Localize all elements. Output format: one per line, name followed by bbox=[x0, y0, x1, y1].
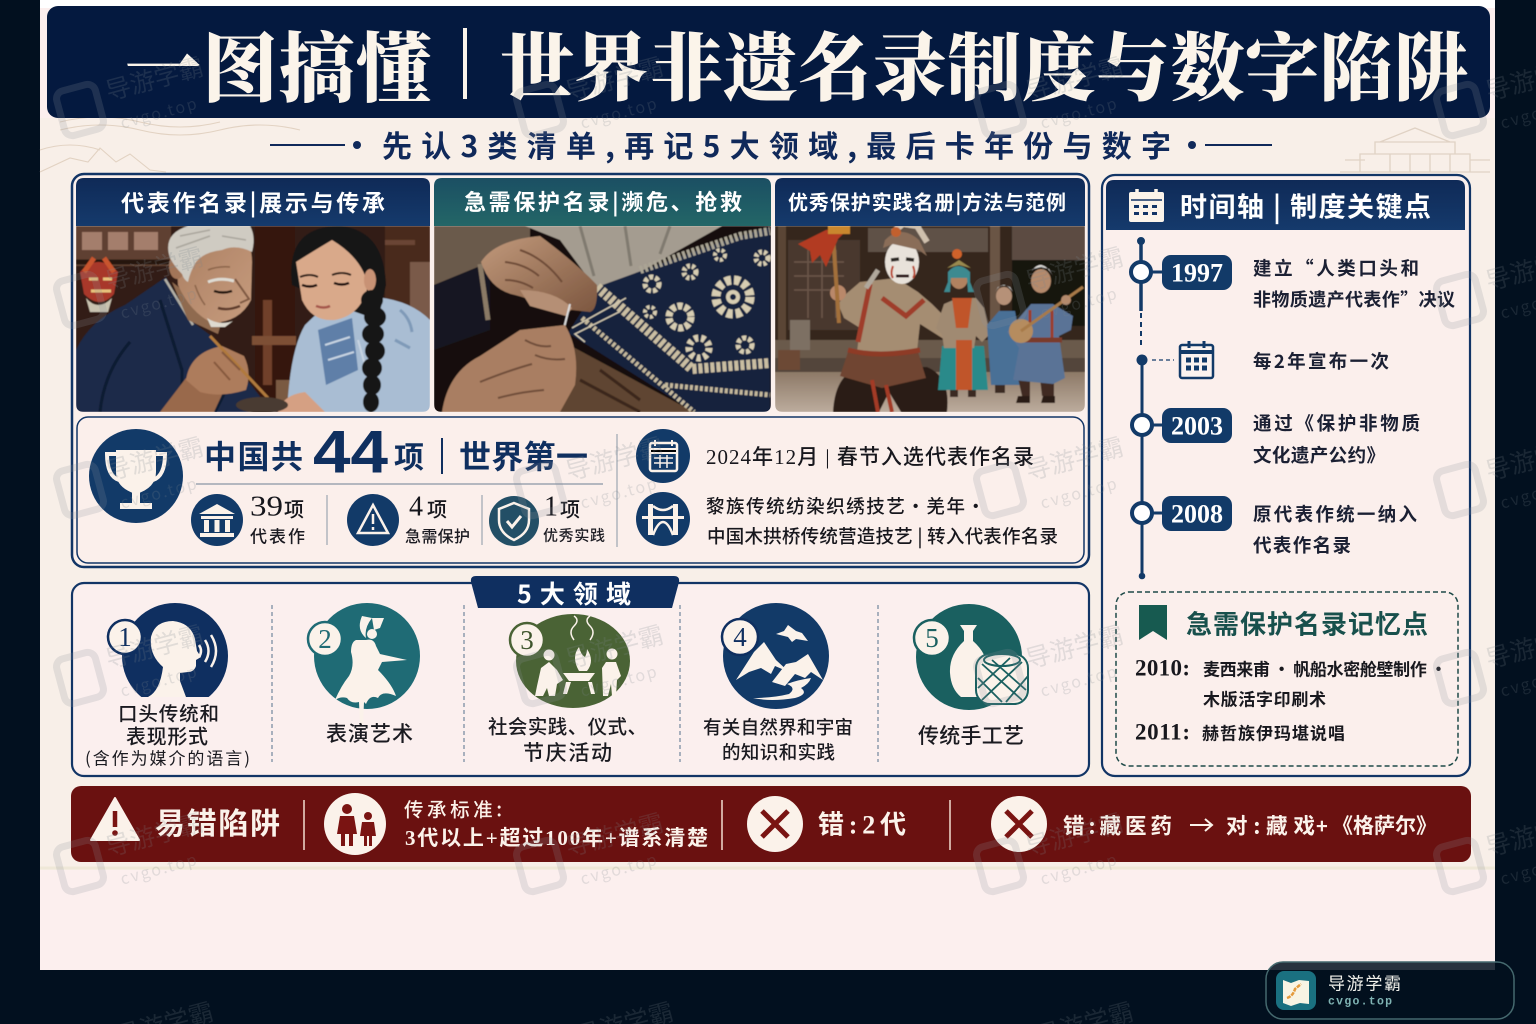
memo box: urgent list: 2010: bbox=[1135, 656, 1190, 680]
indigo cloth bbox=[568, 227, 770, 412]
panel: statistics bbox=[77, 417, 1084, 563]
milestone 2003: 文化遗产公约》 bbox=[1253, 442, 1385, 468]
icon: speaking head bbox=[148, 621, 201, 697]
watermarks: cvgo.top bbox=[117, 280, 201, 324]
floral pattern bbox=[645, 250, 768, 358]
young woman dress bbox=[287, 296, 430, 412]
stat: 1 best practice: 项 bbox=[560, 494, 580, 522]
subtitle: 先认3类清单,再记5大领域,最后卡年份与数字 bbox=[382, 122, 1171, 166]
milestone 1997: 建立“人类口头和 bbox=[1253, 255, 1419, 281]
tab: five domains bbox=[471, 575, 679, 611]
domain 3: social practices bbox=[488, 614, 647, 767]
panel: timeline bbox=[1102, 175, 1470, 776]
watermarks: 导游学霸 bbox=[101, 237, 207, 298]
icon: warning bbox=[347, 494, 399, 546]
watermarks: 导游学霸 bbox=[101, 47, 207, 108]
stat: 39 representative: 代表作 bbox=[250, 522, 305, 548]
icon: campfire with two people bbox=[535, 616, 621, 696]
hands and craft piece bbox=[278, 392, 325, 412]
watermarks: 导游学霸 bbox=[561, 803, 667, 864]
domain 2: performing arts: 表演艺术 bbox=[326, 718, 413, 748]
brand badge: cvgo.top bbox=[1328, 996, 1392, 1008]
milestone 2008 bbox=[1132, 496, 1417, 558]
old man head bbox=[172, 282, 222, 334]
badge 5: 5 bbox=[925, 623, 939, 653]
staff and tassel bbox=[798, 226, 850, 323]
brand badge bbox=[1266, 962, 1514, 1019]
braid bbox=[361, 290, 386, 412]
panel: common traps bar: 传承标准: bbox=[404, 794, 502, 822]
title text: 一图搞懂 bbox=[125, 8, 432, 118]
watermarks: 导游学霸 bbox=[561, 615, 667, 676]
watermarks: 导游学霸 bbox=[101, 427, 207, 488]
domain 2: performing arts bbox=[308, 603, 420, 748]
domain 1: oral traditions: (含作为媒介的语言) bbox=[85, 744, 250, 770]
badge 5 bbox=[914, 620, 950, 656]
icon: map logo bbox=[1276, 971, 1316, 1010]
badge 2: 2 bbox=[318, 624, 332, 654]
icon: bridge bbox=[636, 492, 690, 546]
watermarks: cvgo.top bbox=[1037, 90, 1121, 134]
watermarks: cvgo.top bbox=[577, 846, 661, 890]
watermarks: cvgo.top bbox=[117, 846, 201, 890]
performer in teal skirt bbox=[936, 249, 990, 397]
stat: 1 best practice bbox=[489, 492, 605, 546]
old man jacket bbox=[76, 277, 272, 412]
icon: bookmark bbox=[1139, 605, 1167, 640]
domain 5: traditional crafts bbox=[914, 604, 1028, 750]
memo box: urgent list: 急需保护名录记忆点 bbox=[1186, 604, 1428, 642]
title banner bbox=[47, 6, 1490, 118]
watermarks: cvgo.top bbox=[117, 90, 201, 134]
icon: calendar bbox=[636, 429, 690, 483]
list 3 header bbox=[775, 178, 1085, 226]
stat: 4 urgent: 急需保护 bbox=[405, 523, 470, 547]
stat: 4 urgent: 项 bbox=[427, 494, 447, 522]
watermarks: 导游学霸 bbox=[1021, 803, 1127, 864]
headline: China 44 items bbox=[204, 418, 588, 486]
badge 4 bbox=[722, 619, 758, 655]
memo box: urgent list bbox=[1116, 592, 1458, 766]
watermarks: cvgo.top bbox=[577, 658, 661, 702]
memo box: urgent list: 2011: bbox=[1135, 720, 1190, 744]
icon: museum bbox=[191, 494, 243, 546]
panel: five domains bbox=[72, 575, 1089, 776]
correction text: 对:藏戏 bbox=[1226, 810, 1315, 840]
watermarks: cvgo.top bbox=[1037, 658, 1121, 702]
list 3 header: 优秀保护实践名册|方法与范例 bbox=[788, 186, 1066, 216]
memo box: urgent list: 赫哲族伊玛堪说唱 bbox=[1202, 720, 1345, 744]
domain 4: nature and universe bbox=[703, 603, 853, 765]
timeline header: 时间轴 | 制度关键点 bbox=[1180, 186, 1431, 224]
watermarks: 导游学霸 bbox=[1021, 427, 1127, 488]
milestone 2008: 代表作名录 bbox=[1253, 532, 1351, 558]
milestone 2003 bbox=[1132, 408, 1420, 468]
note: transferred items: 黎族传统纺染织绣技艺·羌年· bbox=[706, 493, 985, 519]
badge 1 bbox=[108, 620, 142, 654]
lower hand bbox=[442, 325, 576, 412]
domain 3: social practices: 社会实践、仪式、 bbox=[488, 710, 647, 740]
watermarks: 导游学霸 bbox=[1021, 47, 1127, 108]
icon: warning triangle bbox=[91, 798, 139, 840]
note: transferred items: 中国木拱桥传统营造技艺 | 转入代表作名录 bbox=[707, 523, 1058, 549]
panel: common traps bar: 3代以上+超过100年+谱系清楚 bbox=[405, 826, 708, 850]
panel: three lists bbox=[72, 174, 1089, 567]
correction text: 错:藏医药 bbox=[1063, 810, 1172, 840]
domain 1: oral traditions bbox=[85, 603, 250, 770]
headline: China 44 items: 44 bbox=[313, 418, 389, 486]
note: transferred items bbox=[706, 493, 1058, 549]
badge 3 bbox=[510, 623, 544, 657]
stat: 4 urgent bbox=[347, 492, 470, 547]
milestone 2003: 2003 bbox=[1171, 412, 1223, 440]
correction text: 《格萨尔》 bbox=[1332, 810, 1437, 840]
icon: dancer bbox=[335, 616, 407, 726]
correction text: + bbox=[1316, 810, 1328, 840]
icon: cross bbox=[747, 796, 803, 852]
list 2 header bbox=[434, 178, 771, 226]
panel: common traps bar bbox=[71, 786, 1471, 862]
milestone 2008: 原代表作统一纳入 bbox=[1253, 501, 1417, 527]
watermarks: 导游学霸 bbox=[1021, 237, 1127, 298]
watermarks: 导游学霸 bbox=[101, 615, 207, 676]
watermarks: cvgo.top bbox=[577, 470, 661, 514]
watermarks: cvgo.top bbox=[117, 470, 201, 514]
memo box: urgent list: 木版活字印刷术 bbox=[1203, 686, 1326, 710]
mask bbox=[80, 258, 118, 312]
stat: 4 urgent: 4 bbox=[409, 492, 423, 522]
upper hand bbox=[481, 236, 597, 313]
badge 4: 4 bbox=[733, 622, 747, 652]
milestone 1997: 非物质遗产代表作”决议 bbox=[1253, 286, 1455, 312]
stat: 39 representative: 39 bbox=[250, 492, 283, 522]
watermarks: 导游学霸 bbox=[101, 803, 207, 864]
milestone 2008: 2008 bbox=[1171, 500, 1223, 528]
old man hand and brush bbox=[160, 378, 226, 412]
icon: cross bbox=[991, 796, 1047, 852]
correction text bbox=[1063, 810, 1437, 840]
musician with lute bbox=[1007, 265, 1083, 403]
watermarks: cvgo.top bbox=[1037, 470, 1121, 514]
memo box: urgent list: 麦西来甫 · 帆船水密舱壁制作 · bbox=[1203, 656, 1447, 680]
timeline header bbox=[1106, 180, 1465, 230]
panel: common traps bar: 易错陷阱 bbox=[155, 799, 280, 843]
elder in blue robe bbox=[987, 285, 1023, 393]
panel: common traps bar: 错:2代 bbox=[818, 810, 906, 840]
domain 1: oral traditions: 口头传统和 bbox=[118, 698, 219, 726]
badge 1: 1 bbox=[118, 622, 132, 652]
list 1 header bbox=[76, 178, 430, 226]
list 1 header: 代表作名录|展示与传承 bbox=[121, 184, 385, 218]
stat: 39 representative bbox=[191, 492, 305, 548]
watermarks: cvgo.top bbox=[1037, 280, 1121, 324]
watermarks: 导游学霸 bbox=[561, 427, 667, 488]
milestone every 2 years: 每2年宣布一次 bbox=[1253, 348, 1389, 374]
milestone every 2 years bbox=[1136, 341, 1389, 378]
brand badge: 导游学霸 bbox=[1328, 970, 1401, 994]
timeline spine bbox=[1138, 238, 1145, 579]
domain 5: traditional crafts: 传统手工艺 bbox=[918, 720, 1024, 750]
hair and face bbox=[291, 226, 386, 320]
domain 3: social practices: 节庆活动 bbox=[523, 737, 612, 767]
icon: shield bbox=[489, 496, 539, 546]
icon: calendar bbox=[1129, 189, 1164, 222]
badge 3: 3 bbox=[520, 625, 534, 655]
milestone 2003: 通过《保护非物质 bbox=[1253, 410, 1420, 436]
stat: 1 best practice: 优秀实践 bbox=[543, 524, 605, 546]
headline: China 44 items: 项 bbox=[394, 433, 424, 477]
stat: 39 representative: 项 bbox=[284, 494, 304, 522]
main performer bbox=[829, 226, 948, 412]
photo: old master teaching young woman bbox=[76, 226, 430, 413]
headline: China 44 items: 世界第一 bbox=[459, 432, 588, 478]
note: 2024 spring festival: 2024年12月 | 春节入选代表作名录 bbox=[706, 445, 1034, 469]
title text: 世界非遗名录制度与数字陷阱 bbox=[500, 10, 1468, 116]
watermarks: 导游学霸 bbox=[561, 47, 667, 108]
stat: 1 best practice: 1 bbox=[544, 492, 558, 522]
domain 1: oral traditions: 表现形式 bbox=[126, 720, 208, 750]
watermarks: 导游学霸 bbox=[1021, 615, 1127, 676]
icon: vase and basket bbox=[950, 625, 1028, 704]
domain 4: nature and universe: 有关自然界和宇宙 bbox=[703, 714, 853, 740]
watermarks: cvgo.top bbox=[117, 658, 201, 702]
icon: calendar bbox=[1180, 341, 1213, 378]
icon: trophy bbox=[89, 429, 183, 523]
milestone 1997 bbox=[1131, 255, 1455, 312]
badge 2 bbox=[308, 622, 342, 656]
photo: hands embroidering indigo cloth bbox=[434, 226, 771, 412]
list 2 header: 急需保护名录|濒危、抢救 bbox=[464, 185, 742, 217]
photo: folk opera performers bbox=[775, 224, 1085, 412]
watermarks: cvgo.top bbox=[1037, 846, 1121, 890]
icon: mountains and river bbox=[736, 625, 823, 700]
headline: China 44 items: 中国共 bbox=[204, 432, 303, 478]
milestone 1997: 1997 bbox=[1171, 258, 1223, 288]
tab: five domains: 5大领域 bbox=[517, 575, 631, 611]
watermarks: cvgo.top bbox=[577, 90, 661, 134]
icon: parent and child bbox=[324, 793, 386, 855]
domain 4: nature and universe: 的知识和实践 bbox=[722, 739, 835, 765]
